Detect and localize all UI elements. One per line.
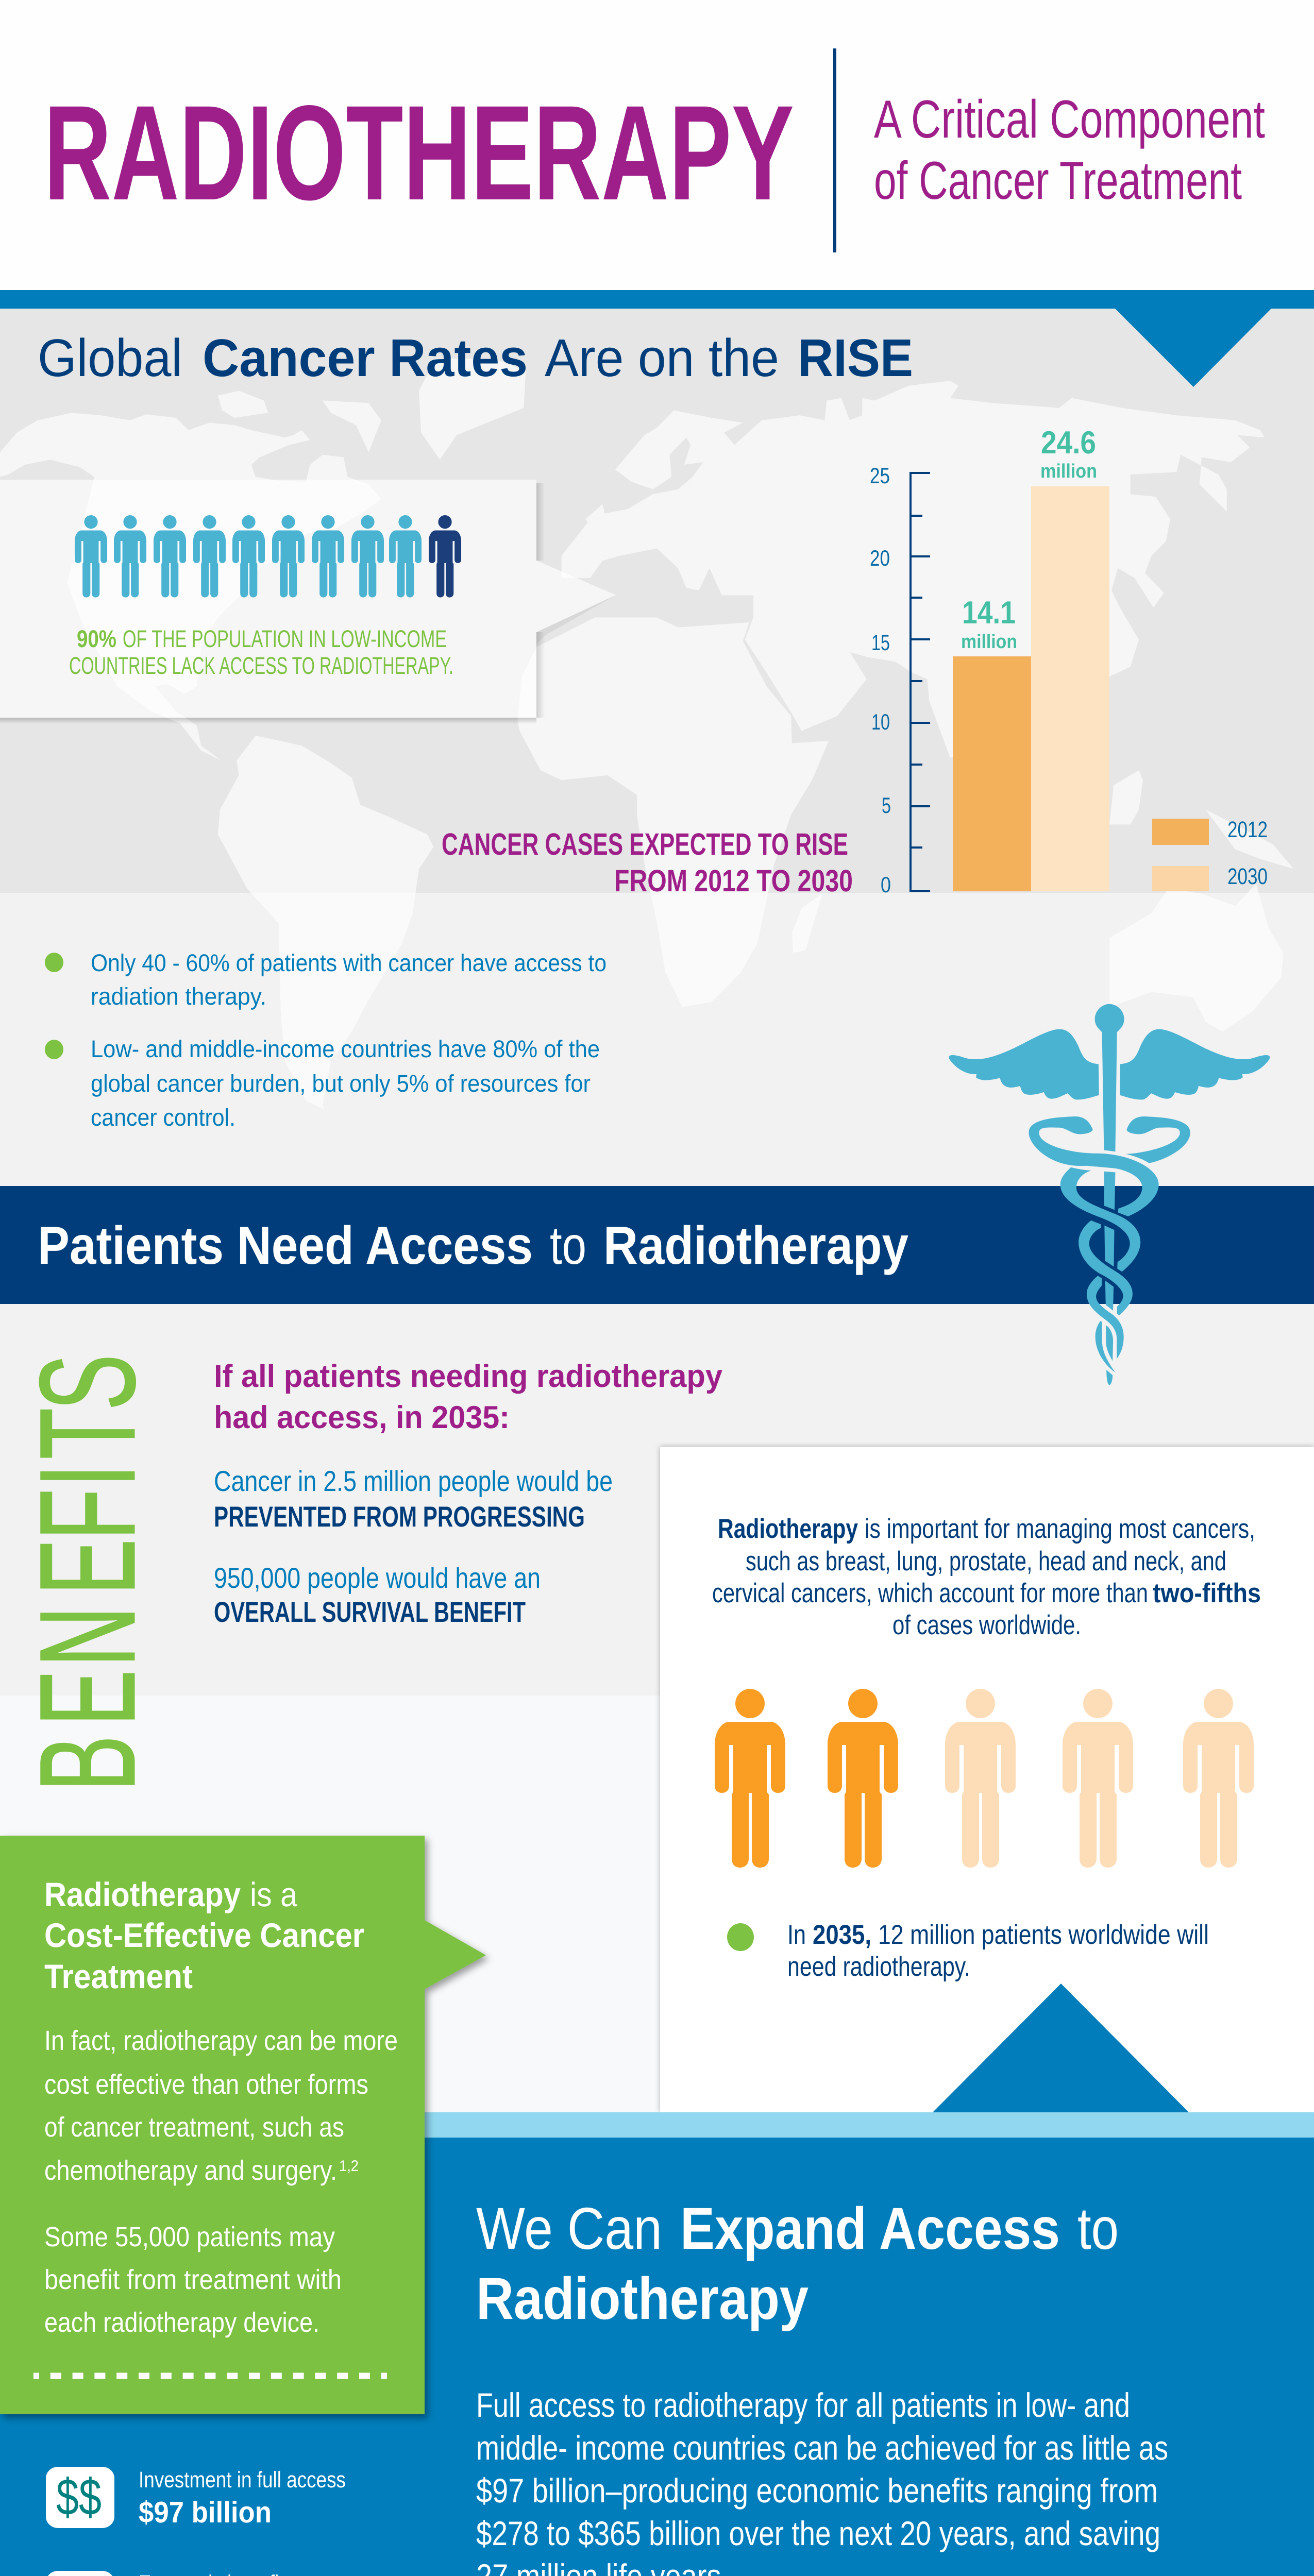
arrow: up triangle xyxy=(933,1984,1189,2112)
axis labels: 10 xyxy=(871,710,890,735)
benefits heading xyxy=(214,1359,722,1435)
panel text xyxy=(712,1514,1261,1640)
stat: investment: Investment in full access xyxy=(139,2467,346,2493)
bullet list: access: global cancer burden, but only 5% of resources for xyxy=(91,1070,591,1097)
benefits text block xyxy=(214,1359,722,1628)
callout panel: population access xyxy=(0,480,616,724)
value label 24.6 million: million xyxy=(1040,461,1097,482)
benefit: overall survival: OVERALL SURVIVAL BENEFIT xyxy=(214,1596,526,1628)
section background: benefits xyxy=(0,1304,1314,1696)
header divider xyxy=(833,48,836,252)
top blue band with arrow xyxy=(0,290,1314,387)
cost-effective heading: Treatment xyxy=(44,1957,193,1995)
devices paragraph: each radiotherapy device. xyxy=(44,2307,319,2338)
benefit: prevented from progressing xyxy=(214,1465,613,1533)
bar 2030 xyxy=(1031,486,1109,891)
bullet: 12 million patients: In xyxy=(787,1920,806,1950)
expand access heading: to xyxy=(1077,2196,1119,2262)
bar chart: cancer cases xyxy=(870,425,1268,897)
callout text xyxy=(69,625,453,679)
stat: investment: $97 billion xyxy=(139,2496,272,2529)
panel: cost-effective treatment xyxy=(0,1836,486,2414)
bullet list: access xyxy=(45,949,607,1131)
bullet: 12 million patients: 12 million patients worldwide will xyxy=(878,1920,1209,1950)
heading: global cancer rates: Are on the xyxy=(545,328,779,387)
cost-effective paragraph: cost effective than other forms xyxy=(44,2069,368,2100)
subtitle xyxy=(874,90,1265,211)
value label 14.1 million xyxy=(961,595,1017,653)
expand access paragraph: $278 to $365 billion over the next 20 years, and saving xyxy=(476,2514,1160,2552)
section background: global rates xyxy=(0,290,1314,893)
chart caption: FROM 2012 TO 2030 xyxy=(614,863,853,898)
panel text: cervical cancers, which account for more than xyxy=(712,1578,1148,1608)
legend: 2030 xyxy=(1227,864,1268,889)
icon: caduceus xyxy=(949,1004,1270,1385)
chart caption: CANCER CASES EXPECTED TO RISE xyxy=(442,827,848,861)
expand access paragraph: Full access to radiotherapy for all patients in low- and xyxy=(476,2386,1130,2424)
stat: economic benefits xyxy=(46,2571,354,2576)
band heading: Patients Need Access xyxy=(38,1216,533,1276)
band heading xyxy=(38,1216,908,1276)
bar 2012 xyxy=(953,656,1031,891)
heading: global cancer rates: Global xyxy=(38,328,182,387)
dashed divider xyxy=(33,2373,387,2379)
cost-effective paragraph: chemotherapy and surgery. xyxy=(44,2155,337,2186)
axis labels: 15 xyxy=(871,631,890,655)
stat: investment xyxy=(46,2467,346,2529)
callout text: 90% xyxy=(77,625,116,652)
callout text: COUNTRIES LACK ACCESS TO RADIOTHERAPY. xyxy=(69,652,453,679)
vertical heading: benefits: BENEFITS xyxy=(12,1354,163,1791)
benefits heading: had access, in 2035: xyxy=(214,1400,510,1435)
bullet list: access: radiation therapy. xyxy=(91,982,266,1010)
expand access paragraph: $97 billion–producing economic benefits ranging from xyxy=(476,2471,1158,2510)
legend: 2012 xyxy=(1227,817,1268,842)
bullet list: access: Low- and middle-income countries have 80% of the xyxy=(91,1035,600,1062)
bullet list: access: cancer control. xyxy=(91,1104,235,1131)
expand access heading: We Can xyxy=(476,2196,662,2262)
benefit: overall survival: 950,000 people would have an xyxy=(214,1562,541,1594)
heading: global cancer rates: RISE xyxy=(798,328,913,387)
title: RADIOTHERAPY xyxy=(44,77,794,228)
expand access heading xyxy=(476,2196,1119,2332)
axis labels: 0 xyxy=(881,873,891,897)
cost-effective paragraph: 1,2 xyxy=(339,2158,359,2175)
benefit: prevented from progressing: PREVENTED FROM PROGRESSING xyxy=(214,1500,585,1533)
expand access heading: Expand Access xyxy=(680,2196,1060,2262)
bullet: 12 million patients: need radiotherapy. xyxy=(787,1952,970,1982)
devices paragraph: Some 55,000 patients may xyxy=(44,2222,335,2252)
value label 14.1 million: 14.1 xyxy=(962,595,1016,631)
heading: global cancer rates xyxy=(38,328,913,387)
chart axis xyxy=(909,472,930,892)
chart caption xyxy=(442,827,853,898)
light blue strip xyxy=(425,2112,1314,2138)
people row: two in five xyxy=(715,1689,1254,1868)
axis labels: 5 xyxy=(882,793,891,818)
band heading: Radiotherapy xyxy=(603,1216,908,1276)
cost-effective heading: is a xyxy=(250,1875,297,1913)
devices paragraph xyxy=(44,2222,342,2338)
expand access paragraph: middle- income countries can be achieved for as little as xyxy=(476,2429,1168,2467)
value label 14.1 million: million xyxy=(961,631,1017,653)
panel text: of cases worldwide. xyxy=(892,1610,1081,1640)
devices paragraph: benefit from treatment with xyxy=(44,2264,342,2295)
cost-effective paragraph: In fact, radiotherapy can be more xyxy=(44,2025,398,2056)
benefit: overall survival xyxy=(214,1562,541,1628)
header background xyxy=(0,0,1314,290)
section background: bullet area xyxy=(0,893,1314,1186)
expand access heading: Radiotherapy xyxy=(476,2266,808,2332)
cost-effective heading: Cost-Effective Cancer xyxy=(44,1916,364,1954)
stat: investment: $$ xyxy=(56,2468,102,2526)
panel: expand access xyxy=(0,2112,1314,2576)
callout text: OF THE POPULATION IN LOW-INCOME xyxy=(123,625,447,652)
dark band: patients need access xyxy=(0,1186,1314,1304)
band heading: to xyxy=(550,1216,586,1276)
cost-effective paragraph: of cancer treatment, such as xyxy=(44,2112,344,2143)
panel: managing most cancers xyxy=(660,1447,1314,2112)
heading: global cancer rates: Cancer Rates xyxy=(203,328,528,387)
panel text: Radiotherapy xyxy=(718,1514,858,1544)
bullet: 12 million patients: 2035, xyxy=(813,1920,871,1950)
value label 24.6 million xyxy=(1040,425,1097,482)
benefit: prevented from progressing: Cancer in 2.5 million people would be xyxy=(214,1465,613,1497)
axis labels: 20 xyxy=(870,546,890,571)
cost-effective heading xyxy=(44,1875,364,1995)
panel text: two-fifths xyxy=(1153,1578,1261,1608)
value label 24.6 million: 24.6 xyxy=(1041,425,1096,461)
cost-effective heading: Radiotherapy xyxy=(44,1875,241,1913)
expand access paragraph xyxy=(476,2386,1168,2576)
axis labels xyxy=(870,464,891,897)
section background: pale area xyxy=(0,1696,1314,2118)
bullet list: access: Only 40 - 60% of patients with cancer have access to xyxy=(91,949,607,976)
cost-effective paragraph xyxy=(44,2025,398,2186)
benefits heading: If all patients needing radiotherapy xyxy=(214,1359,722,1394)
legend xyxy=(1152,817,1268,891)
bullet: 12 million patients xyxy=(727,1920,1209,1982)
axis labels: 25 xyxy=(870,464,890,488)
people row: nine in ten xyxy=(75,515,461,598)
world map xyxy=(0,359,1294,1110)
